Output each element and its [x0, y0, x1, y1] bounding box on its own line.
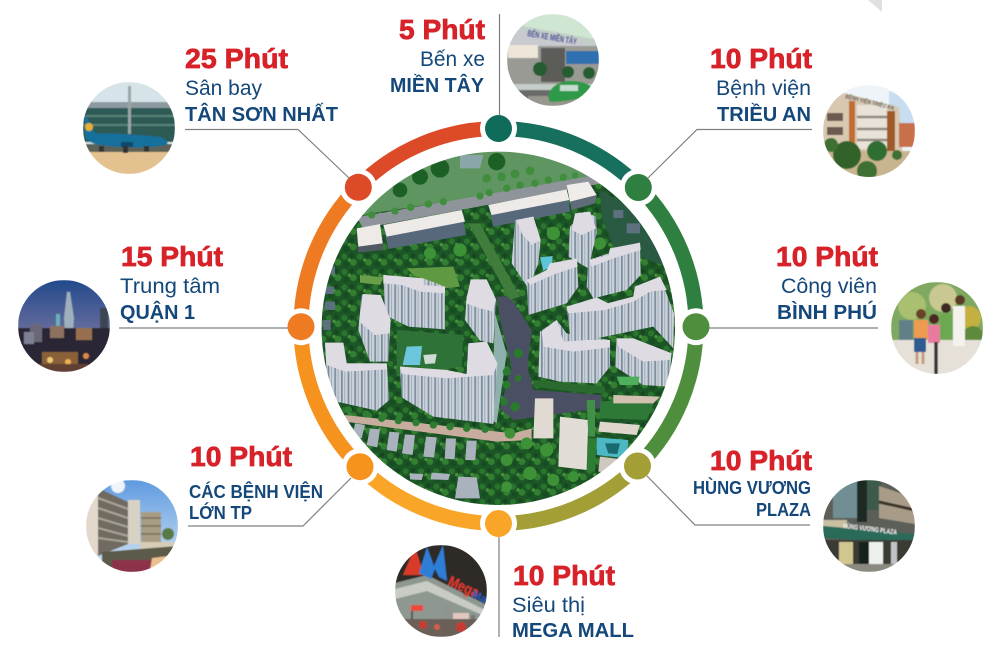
- label: 10 phút Bình Phú: BÌNH PHÚ: [777, 300, 877, 324]
- connector: Hùng Vương: [647, 476, 810, 525]
- ring arc: right to lower right: [638, 326, 696, 466]
- lower right block: [533, 395, 660, 473]
- label: 10 phút Mega Mall: MEGA MALL: [512, 620, 634, 642]
- townhouse rows: [357, 182, 597, 253]
- label: 5 phút Miền Tây: [390, 14, 485, 97]
- photo: Tân Sơn Nhất airport: [83, 82, 175, 174]
- label: 10 phút Hùng Vương: 10 Phút: [710, 445, 812, 476]
- label: 10 phút Hùng Vương: HÙNG VƯƠNG: [693, 477, 811, 498]
- label: 10 phút Bình Phú: Công viên: [781, 275, 877, 298]
- photo: Hùng Vương Plaza: [823, 480, 915, 572]
- ring arc: bottom to lower left: [359, 466, 498, 524]
- label: 25 phút Tân Sơn Nhất: Sân bay: [185, 77, 262, 100]
- label: 15 phút Quận 1: 15 Phút: [121, 241, 223, 272]
- label: 10 phút Các bệnh viện: 10 Phút: [190, 441, 292, 472]
- connector: Bình Phú: [709, 327, 878, 329]
- label: 10 phút Các bệnh viện: [189, 441, 323, 523]
- label: 5 phút Miền Tây: MIỀN TÂY: [390, 73, 485, 97]
- ring arc: left to upper left: [301, 186, 359, 326]
- bottom houses: [353, 423, 480, 498]
- label: 10 phút Triều An: TRIỀU AN: [717, 103, 811, 126]
- label: 10 phút Hùng Vương: PLAZA: [756, 499, 811, 520]
- label: 25 phút Tân Sơn Nhất: [185, 43, 338, 126]
- connector: Triều An: [648, 130, 812, 178]
- photo: Mega Market: [395, 545, 487, 637]
- ring node markers: [282, 110, 714, 542]
- label: 10 phút Bình Phú: [776, 241, 878, 324]
- label: 10 phút Bình Phú: 10 Phút: [776, 241, 878, 272]
- label: 5 phút Miền Tây: Bến xe: [420, 48, 485, 71]
- photo: Bến xe Miền Tây: BẾN XE MIỀN TÂY: [527, 27, 578, 47]
- label: 10 phút Mega Mall: 10 Phút: [513, 560, 615, 591]
- label: 10 phút Triều An: 10 Phút: [710, 43, 812, 74]
- photo: Mega Market: Mega: [445, 573, 482, 602]
- connector: Miền Tây: [498, 14, 500, 115]
- label: 5 phút Miền Tây: 5 Phút: [399, 14, 485, 45]
- photo: Trung tâm Quận 1: [18, 280, 110, 372]
- label: 25 phút Tân Sơn Nhất: TÂN SƠN NHẤT: [185, 102, 338, 126]
- ring arc: lower left to left: [301, 326, 359, 466]
- label: 15 phút Quận 1: QUẬN 1: [120, 300, 195, 324]
- connector: Mega Mall: [498, 537, 500, 637]
- connector: Quận 1: [119, 327, 288, 329]
- label: 15 phút Quận 1: [120, 241, 223, 324]
- photo: Bến xe Miền Tây: [507, 14, 599, 106]
- central aerial view of the development: [313, 143, 683, 513]
- label: 10 phút Triều An: Bệnh viện: [716, 77, 811, 100]
- photo: Hùng Vương Plaza: HÙNG VƯƠNG PLAZA: [843, 521, 897, 537]
- ring arc: lower right to bottom: [498, 466, 638, 524]
- ring arc: top to upper right: [498, 128, 638, 186]
- label: 10 phút Triều An: [710, 43, 812, 126]
- photo: Công viên Bình Phú: [891, 282, 983, 374]
- photo: Mega Market: Market: [470, 589, 507, 614]
- connector: Các bệnh viện: [188, 478, 351, 526]
- photo: Bệnh viện Triều An: [823, 85, 915, 181]
- connector: Tân Sơn Nhất: [185, 130, 349, 178]
- towers: [325, 212, 674, 424]
- label: 15 phút Quận 1: Trung tâm: [120, 275, 220, 298]
- photo: Bệnh viện Triều An: BỆNH VIỆN TRIỀU AN: [845, 92, 895, 112]
- label: 10 phút Các bệnh viện: CÁC BỆNH VIỆN: [189, 481, 323, 502]
- label: 10 phút Mega Mall: Siêu thị: [512, 594, 585, 617]
- photo: Các bệnh viện lớn: [86, 479, 178, 572]
- ring arc: upper right to right: [638, 186, 696, 326]
- label: 10 phút Hùng Vương: [693, 445, 812, 520]
- label: 25 phút Tân Sơn Nhất: 25 Phút: [185, 43, 288, 74]
- ring arc: upper left to top: [359, 128, 498, 186]
- label: 10 phút Các bệnh viện: LỚN TP: [189, 502, 252, 523]
- label: 10 phút Mega Mall: [512, 560, 634, 642]
